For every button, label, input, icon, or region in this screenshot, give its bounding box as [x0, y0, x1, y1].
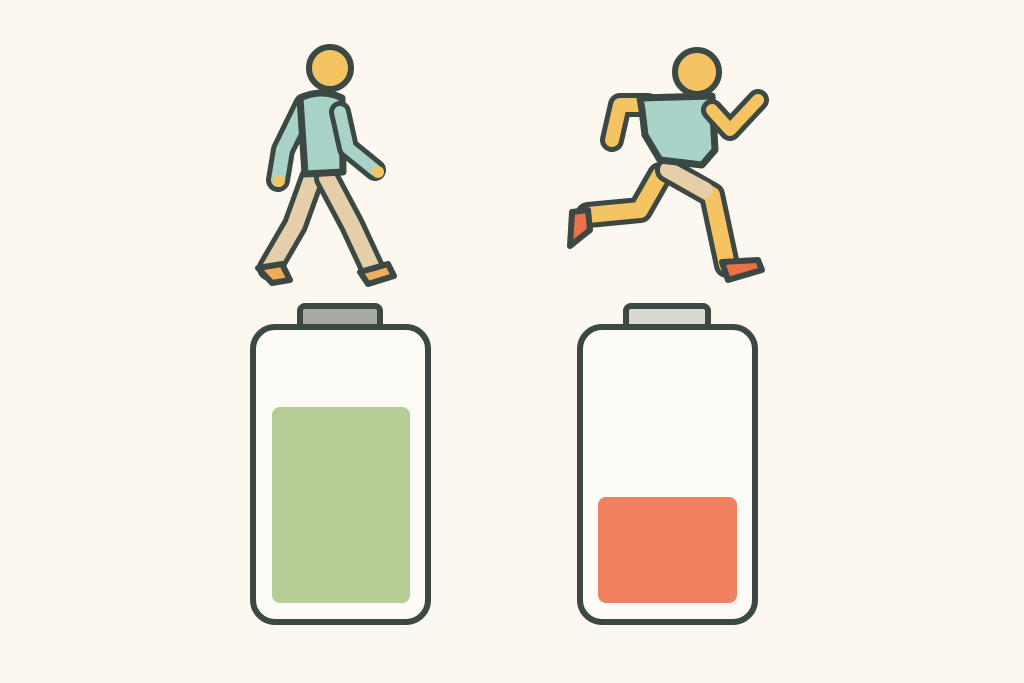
runner torso: [640, 96, 715, 165]
green level: [272, 407, 410, 603]
walker torso: [300, 93, 343, 174]
runner front leg: [668, 170, 762, 280]
runner front arm: [712, 100, 758, 130]
walker front arm: [340, 112, 384, 178]
icon: running person: [570, 50, 762, 280]
icon: walking person: [258, 47, 394, 284]
battery: low charge: [580, 306, 755, 622]
runner back arm: [612, 105, 648, 140]
walker back arm: [273, 105, 305, 187]
runner back leg: [570, 175, 660, 246]
walker legs: [258, 178, 394, 284]
red level: [598, 497, 737, 603]
runner head: [675, 50, 719, 94]
walker head: [309, 47, 351, 89]
battery: high charge: [253, 306, 428, 622]
